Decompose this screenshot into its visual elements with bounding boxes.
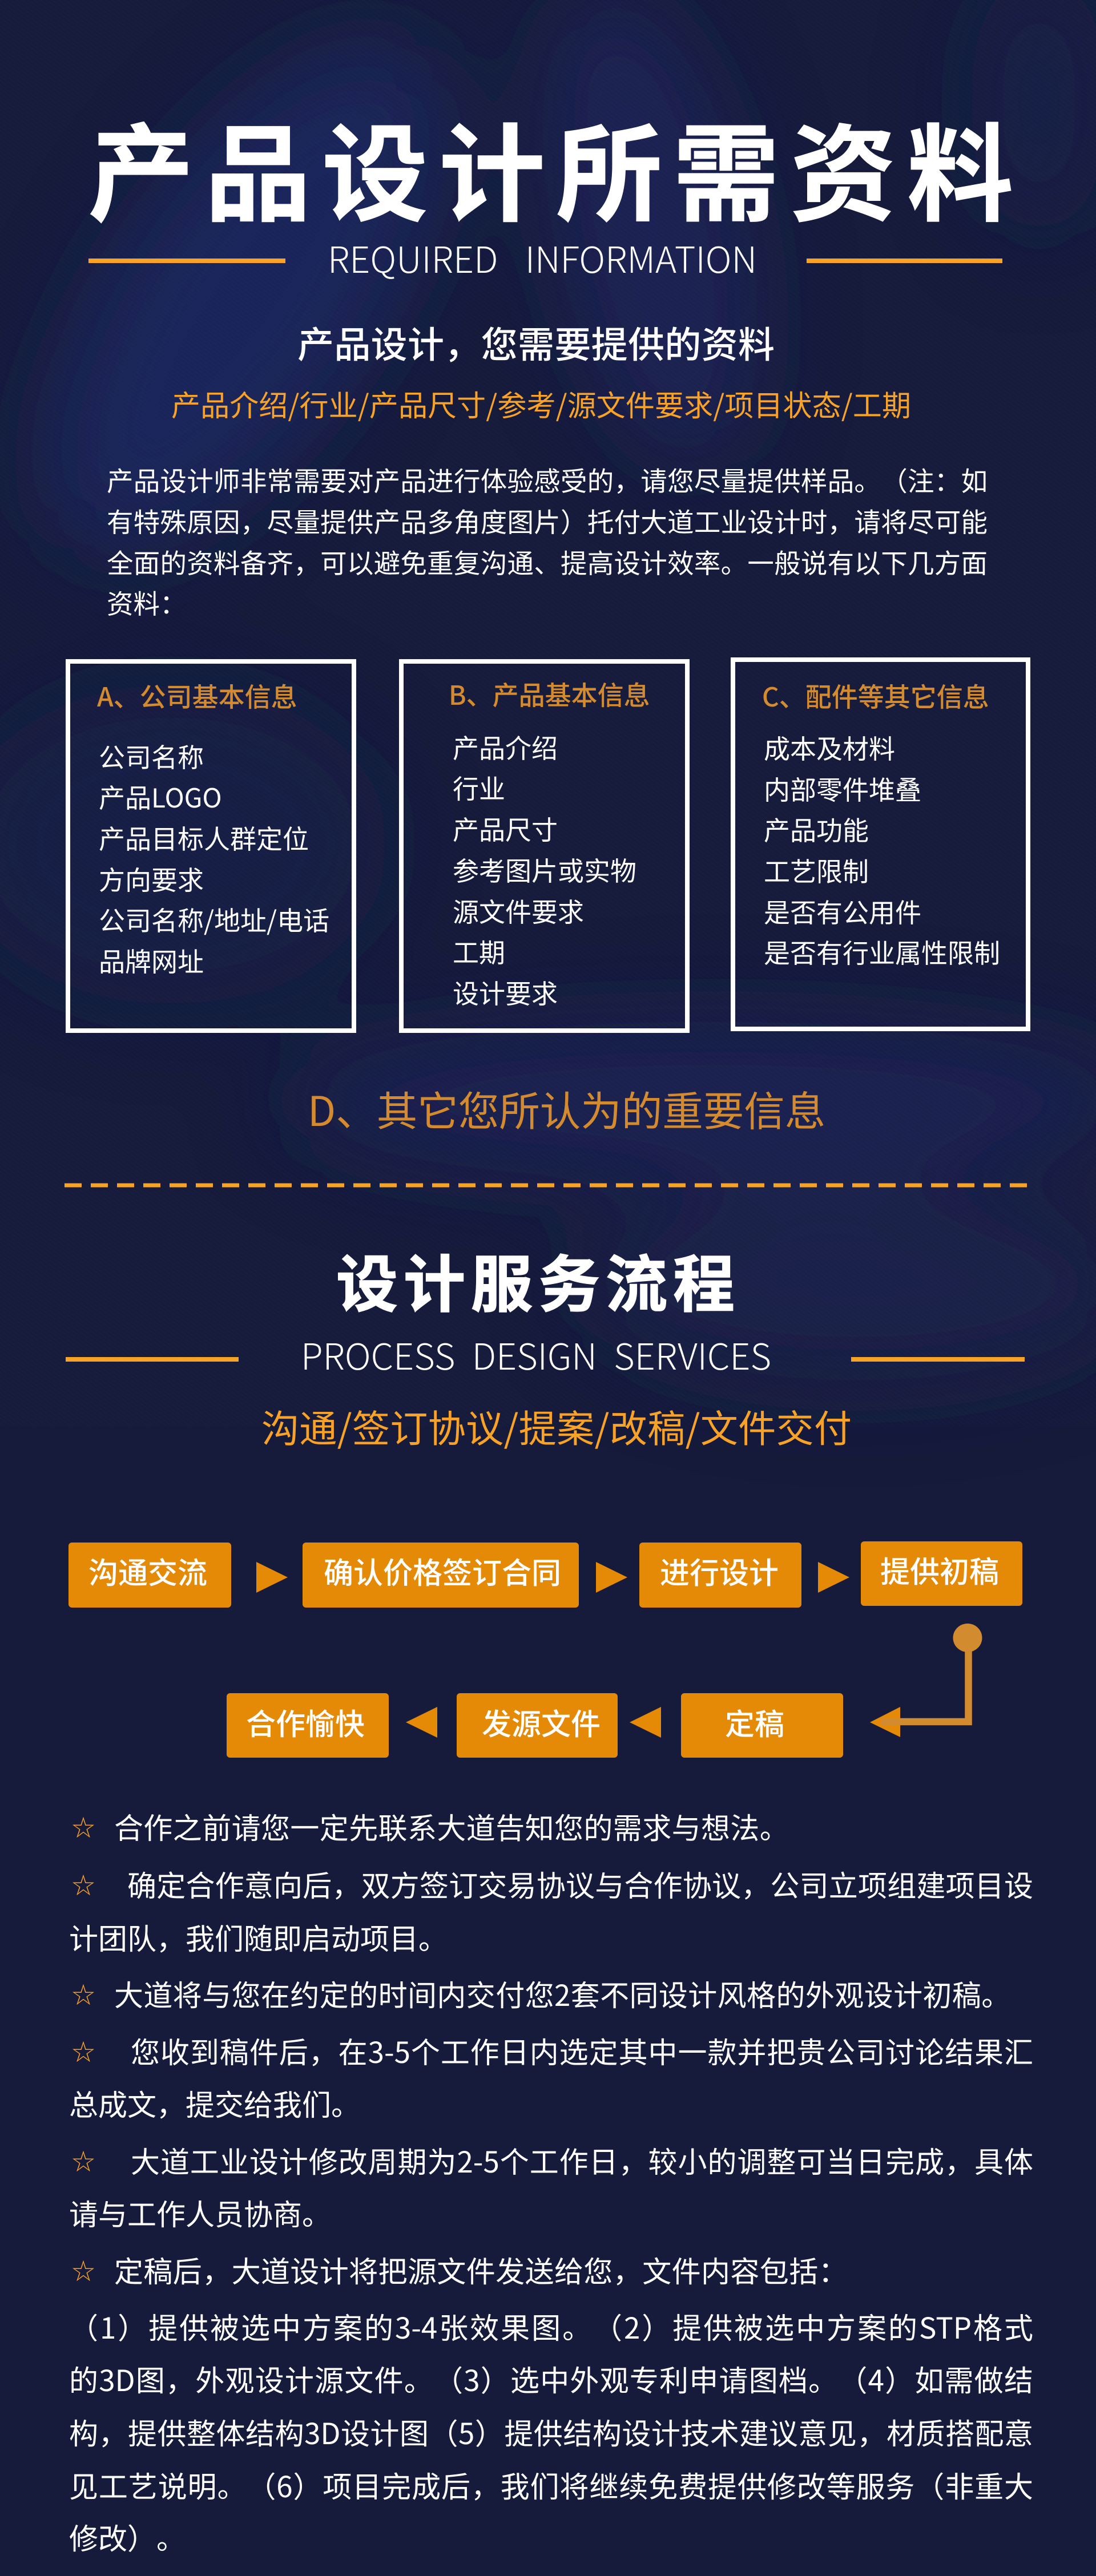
process step: 确认价格签订合同 — [303, 1543, 579, 1608]
panel C heading: C、配件等其它信息 — [762, 677, 989, 714]
panel B list: 参考图片或实物 — [453, 851, 636, 889]
deliverables list: 修改）。 — [69, 2516, 186, 2558]
section rule: left — [66, 1357, 239, 1362]
panel B list: 产品介绍 — [453, 728, 558, 766]
elbow connector arrow — [870, 1624, 982, 1737]
intro paragraph: 产品设计师非常需要对产品进行体验感受的，请您尽量提供样品。（注：如 — [107, 461, 988, 499]
arrow — [406, 1707, 437, 1738]
process notes — [69, 1805, 1033, 2558]
intro paragraph: 有特殊原因，尽量提供产品多角度图片）托付大道工业设计时，请将尽可能 — [107, 502, 988, 540]
subheading: 产品设计，您需要提供的资料 — [297, 316, 775, 369]
note 4: 您收到稿件后，在3-5个工作日内选定其中一款并把贵公司讨论结果汇 — [131, 2029, 1033, 2072]
subtitle rule: right — [807, 259, 1002, 263]
panel B list: 设计要求 — [453, 974, 558, 1011]
deliverables list: 的3D图，外观设计源文件。（3）选中外观专利申请图档。（4）如需做结 — [69, 2357, 1033, 2400]
panel A list: 公司名称 — [99, 737, 204, 775]
orange keywords: 产品介绍/行业/产品尺寸/参考/源文件要求/项目状态/工期 — [171, 382, 911, 425]
panel B list: 产品尺寸 — [453, 810, 558, 847]
dashed divider — [65, 1184, 1027, 1187]
panel A heading: A、公司基本信息 — [97, 677, 297, 714]
panel A list: 品牌网址 — [99, 942, 204, 979]
title: 产品设计所需资料 — [88, 89, 1024, 243]
process step: 进行设计 — [639, 1543, 801, 1608]
panel A list: 公司名称/地址/电话 — [99, 901, 329, 938]
panel C: accessories and other info — [731, 657, 1030, 1031]
process step: 定稿: 定稿 — [725, 1701, 784, 1743]
process step: 确认价格签订合同: 确认价格签订合同 — [324, 1549, 561, 1592]
subtitle rule: left — [88, 259, 285, 263]
process step: 合作愉快: 合作愉快 — [246, 1701, 365, 1743]
deliverables list: 构，提供整体结构3D设计图（5）提供结构设计技术建议意见，材质搭配意 — [69, 2411, 1033, 2453]
process step: 发源文件: 发源文件 — [482, 1701, 601, 1743]
arrow — [630, 1707, 661, 1738]
english subtitle: REQUIRED INFORMATION — [328, 232, 757, 284]
deliverables list: （1）提供被选中方案的3-4张效果图。（2）提供被选中方案的STP格式 — [69, 2305, 1033, 2347]
panel C list: 成本及材料 — [764, 729, 895, 766]
note 3: 大道将与您在约定的时间内交付您2套不同设计风格的外观设计初稿。 — [114, 1972, 1011, 2014]
process step: 提供初稿: 提供初稿 — [880, 1548, 999, 1591]
panel C list: 是否有公用件 — [764, 893, 921, 930]
panel B list: 工期 — [453, 932, 505, 970]
note 5: 大道工业设计修改周期为2-5个工作日，较小的调整可当日完成，具体 — [131, 2139, 1033, 2181]
process step: 发源文件 — [457, 1693, 618, 1758]
arrow — [818, 1562, 849, 1593]
intro paragraph — [107, 461, 988, 621]
deliverables list: 见工艺说明。（6）项目完成后，我们将继续免费提供修改等服务（非重大 — [69, 2464, 1033, 2506]
section rule: right — [851, 1357, 1025, 1362]
note 4: 总成文，提交给我们。 — [69, 2082, 360, 2124]
panel C list: 是否有行业属性限制 — [764, 933, 1000, 971]
process step: 沟通交流 — [68, 1543, 231, 1608]
note 5 — [69, 2140, 1034, 2231]
note 4 — [69, 2032, 1034, 2123]
arrow — [596, 1562, 627, 1593]
panel A list: 方向要求 — [99, 860, 204, 898]
panel C list: 内部零件堆叠 — [764, 770, 921, 807]
panel C list: 工艺限制 — [764, 851, 869, 889]
panel B list — [453, 728, 636, 1011]
note 5: 请与工作人员协商。 — [69, 2191, 331, 2234]
panel B heading: B、产品基本信息 — [449, 675, 650, 713]
intro paragraph: 全面的资料备齐，可以避免重复沟通、提高设计效率。一般说有以下几方面 — [107, 543, 988, 581]
intro paragraph: 资料： — [107, 583, 186, 621]
process step: 进行设计: 进行设计 — [660, 1549, 779, 1592]
process step: 沟通交流: 沟通交流 — [88, 1549, 207, 1592]
note 2 — [69, 1866, 1034, 1957]
process step: 提供初稿 — [861, 1541, 1022, 1606]
arrow — [256, 1562, 288, 1593]
orange process keywords: 沟通/签订协议/提案/改稿/文件交付 — [261, 1399, 852, 1453]
panel A list: 产品LOGO — [99, 778, 222, 815]
panel A: company info — [66, 659, 356, 1033]
note 3: ☆ — [72, 1977, 95, 2010]
note 2: ☆ — [72, 1867, 95, 1900]
note 6: ☆ — [72, 2253, 95, 2286]
section title: 设计服务流程 — [336, 1235, 740, 1325]
panel B list: 源文件要求 — [453, 892, 584, 930]
note 5: ☆ — [72, 2143, 95, 2177]
deliverables list — [69, 2306, 1034, 2557]
note 2: 确定合作意向后，双方签订交易协议与合作协议，公司立项组建项目设 — [127, 1863, 1033, 1905]
panel B: product info — [399, 659, 690, 1033]
note 1: ☆ — [72, 1810, 95, 1843]
note 6: 定稿后，大道设计将把源文件发送给您，文件内容包括： — [114, 2248, 848, 2291]
note 2: 计团队，我们随即启动项目。 — [69, 1916, 448, 1958]
panel C list — [764, 729, 1000, 971]
process step: 合作愉快 — [227, 1693, 389, 1758]
english section subtitle: PROCESS DESIGN SERVICES — [301, 1329, 771, 1380]
panel A list — [99, 737, 329, 979]
note 4: ☆ — [72, 2034, 95, 2067]
panel C list: 产品功能 — [764, 810, 869, 848]
process step: 定稿 — [681, 1693, 843, 1758]
panel B list: 行业 — [453, 769, 505, 806]
panel A list: 产品目标人群定位 — [99, 819, 309, 857]
note 1: 合作之前请您一定先联系大道告知您的需求与想法。 — [114, 1805, 789, 1847]
item D callout: D、其它您所认为的重要信息 — [308, 1079, 825, 1138]
